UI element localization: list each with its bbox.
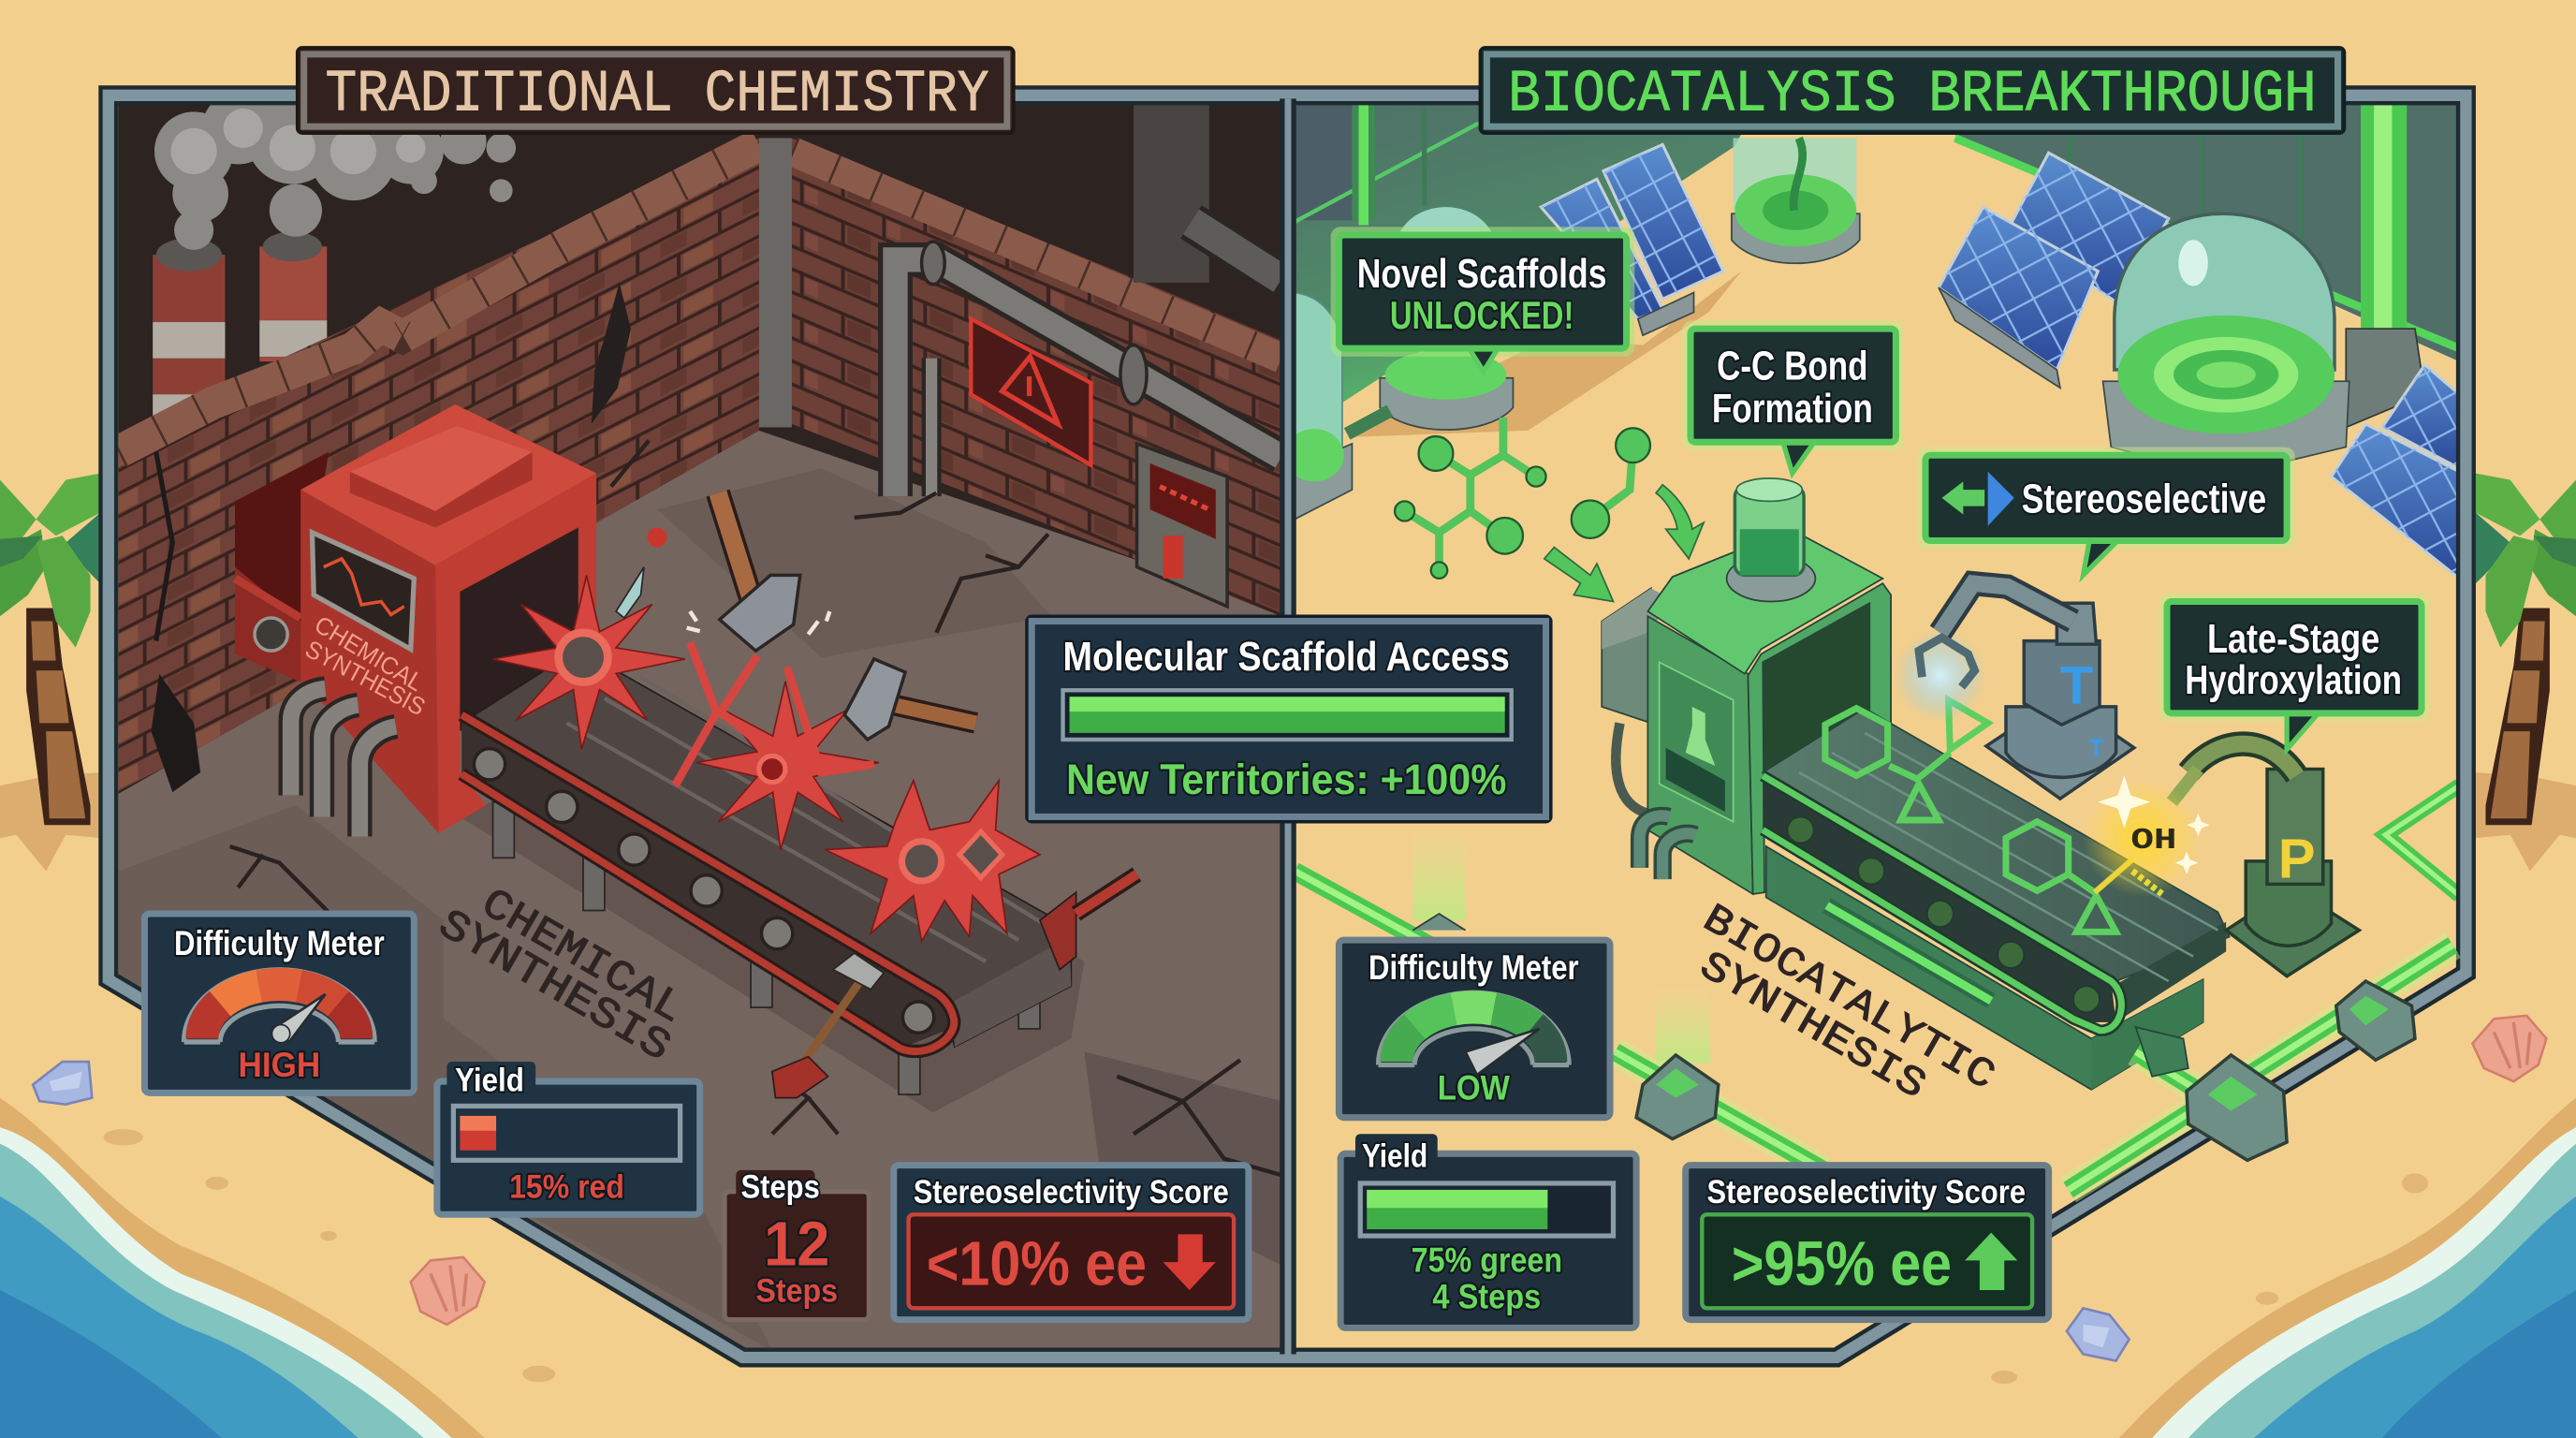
spiky scaffold molecules xyxy=(493,576,1040,942)
hydroxylation robot arm xyxy=(2083,744,2359,976)
drive cap xyxy=(1040,892,1076,970)
panel: difficulty meter high xyxy=(144,914,414,1093)
panel: stereoselectivity score low xyxy=(894,1166,1249,1320)
callout: novel scaffolds: UNLOCKED! xyxy=(1390,293,1573,337)
gauge xyxy=(184,970,374,1043)
panel: yield 75%: 4 Steps xyxy=(1432,1277,1541,1315)
icon: down arrow xyxy=(1164,1234,1216,1290)
hammers xyxy=(616,493,1137,1098)
callout: c-c bond formation xyxy=(1686,324,1901,474)
panel: yield 15% xyxy=(437,1062,700,1214)
panel: difficulty meter low: LOW xyxy=(1438,1068,1510,1107)
stereoselective robot arm xyxy=(1895,583,2134,799)
chemical synthesis machine xyxy=(235,404,596,837)
callout: novel scaffolds xyxy=(1334,230,1632,372)
smoke plumes xyxy=(154,92,516,250)
floor shadow xyxy=(1347,271,1741,437)
title: traditional chemistry: TRADITIONAL CHEMISTRY xyxy=(326,61,989,128)
green arrows xyxy=(1544,485,1704,601)
machine screen xyxy=(312,533,414,649)
panel: yield 75%: Yield xyxy=(1362,1137,1427,1174)
machine label: CHEMICAL xyxy=(310,610,429,697)
OH label: OH xyxy=(2130,825,2177,858)
panel: difficulty meter low xyxy=(1339,940,1610,1118)
panel: yield 75% xyxy=(1340,1134,1636,1328)
callout: late-stage hydroxylation: Hydroxylation xyxy=(2185,657,2402,703)
panel: steps 12: Steps xyxy=(755,1272,838,1309)
callout: c-c bond formation: C-C Bond xyxy=(1717,344,1868,389)
solar panels xyxy=(1541,144,2459,579)
beach and water: left xyxy=(0,1098,485,1438)
palm tree left xyxy=(0,474,102,871)
left neon floor pipes xyxy=(1295,829,1710,1064)
chevron pipe xyxy=(2385,785,2459,896)
stereoselective robot arm: T xyxy=(2060,655,2093,715)
big dome xyxy=(2103,213,2349,477)
floor cracks xyxy=(230,440,1281,1175)
panel: stereoselectivity score high: >95% ee xyxy=(1732,1230,1952,1299)
machine hoses xyxy=(1640,815,1695,879)
panel: molecular scaffold access xyxy=(1027,616,1551,822)
control panel xyxy=(1137,444,1227,607)
title: biocatalysis breakthrough: BIOCATALYSIS BREAKTHROUGH xyxy=(1508,61,2317,128)
yield bar xyxy=(1360,1183,1614,1236)
machine display xyxy=(1660,662,1734,822)
neon wall pipes xyxy=(1352,102,2425,427)
molecules xyxy=(1395,418,1650,579)
panel: steps 12: Steps xyxy=(741,1169,820,1206)
panel: yield 15%: Yield xyxy=(455,1063,524,1099)
panel: difficulty meter low: Difficulty Meter xyxy=(1368,948,1579,987)
stereoselective robot arm: T xyxy=(2088,733,2104,761)
product molecules on belt xyxy=(1825,700,2116,932)
conveyor label: BIOCATALYTIC xyxy=(1694,896,2002,1101)
hydroxylation robot arm: P xyxy=(2278,827,2316,889)
panel: stereoselectivity score low: <10% ee xyxy=(927,1230,1147,1299)
conveyor label: SYNTHESIS xyxy=(430,901,679,1072)
palm tree right xyxy=(2474,474,2576,871)
panel: biocatalysis scene xyxy=(1284,102,2459,1110)
panel: molecular scaffold access: New Territories: +100% xyxy=(1066,756,1506,803)
conveyor label: CHEMICAL xyxy=(473,879,692,1034)
green conveyor xyxy=(1763,700,2230,1090)
conveyor label: SYNTHESIS xyxy=(1691,943,1934,1110)
progress bar xyxy=(1063,690,1512,740)
panel: stereoselectivity score high: Stereoselectivity Score xyxy=(1707,1174,2026,1211)
corner pipe xyxy=(759,138,792,427)
left side domes xyxy=(1284,207,1513,520)
shell: pink right xyxy=(2472,1016,2546,1081)
icon: up arrow xyxy=(1965,1233,2017,1290)
panel: stereoselectivity score low: Stereoselectivity Score xyxy=(914,1174,1229,1211)
smokestacks xyxy=(153,232,327,427)
shell: pink left xyxy=(411,1257,485,1325)
panel: stereoselectivity score high xyxy=(1686,1166,2049,1320)
neon pipes and brackets over frame xyxy=(1615,945,2452,1190)
panel: difficulty meter high: HIGH xyxy=(238,1046,320,1084)
beach and water: right xyxy=(2119,1098,2576,1438)
sand specks xyxy=(104,1129,2428,1384)
icon: mirror arrows xyxy=(1942,472,2014,526)
gauge xyxy=(1379,992,1569,1075)
back walls xyxy=(1295,102,2459,437)
callout: late-stage hydroxylation: Late-Stage xyxy=(2207,616,2379,662)
panel: molecular scaffold access: Molecular Scaffold Access xyxy=(1063,634,1510,680)
factory floor xyxy=(118,431,1281,1351)
left brick wall xyxy=(118,138,759,794)
shell: blue right xyxy=(2067,1308,2130,1360)
machine label: SYNTHESIS xyxy=(300,635,430,721)
small plant dome xyxy=(1732,138,1860,263)
panel: yield 15%: 15% red xyxy=(509,1169,624,1206)
reaction vial xyxy=(1727,478,1815,601)
yield bar xyxy=(453,1106,681,1160)
callout: stereoselective: Stereoselective xyxy=(2022,477,2266,522)
panel: steps 12 xyxy=(724,1169,869,1320)
wall pipes xyxy=(896,242,1281,496)
right brick wall xyxy=(792,102,1281,616)
shell: blue left xyxy=(33,1062,92,1105)
callout: stereoselective xyxy=(1921,450,2291,575)
callout: c-c bond formation: Formation xyxy=(1712,386,1873,432)
panel: traditional chemistry scene xyxy=(118,92,1281,1368)
callout: novel scaffolds: Novel Scaffolds xyxy=(1357,251,1606,297)
conveyor belt xyxy=(461,649,1076,1094)
machine pipes xyxy=(291,689,396,837)
panel: steps 12: 12 xyxy=(764,1211,829,1280)
panel: difficulty meter high: Difficulty Meter xyxy=(174,924,385,962)
callout: late-stage hydroxylation xyxy=(2162,596,2426,749)
biocatalytic machine xyxy=(1602,478,1891,894)
warning sign xyxy=(971,319,1090,465)
panel: yield 75%: 75% green xyxy=(1412,1241,1562,1280)
